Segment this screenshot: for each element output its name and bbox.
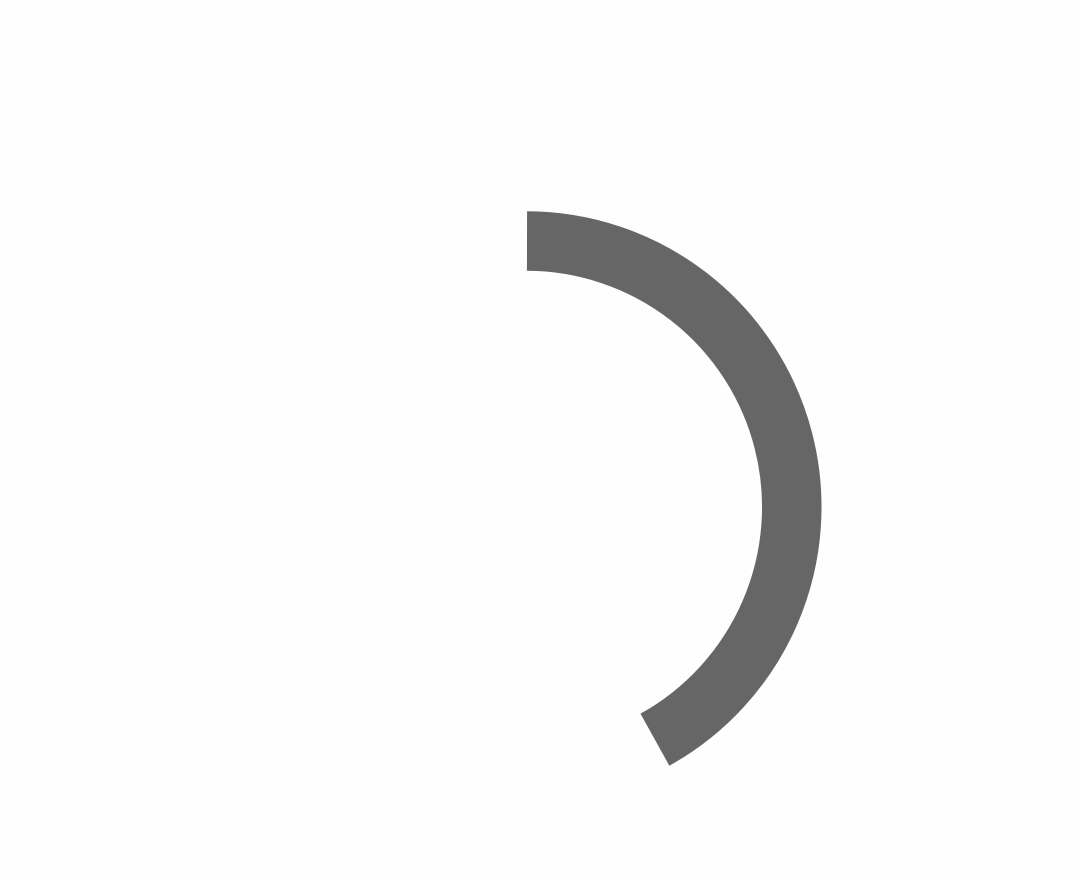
arc segment <box>527 241 792 740</box>
